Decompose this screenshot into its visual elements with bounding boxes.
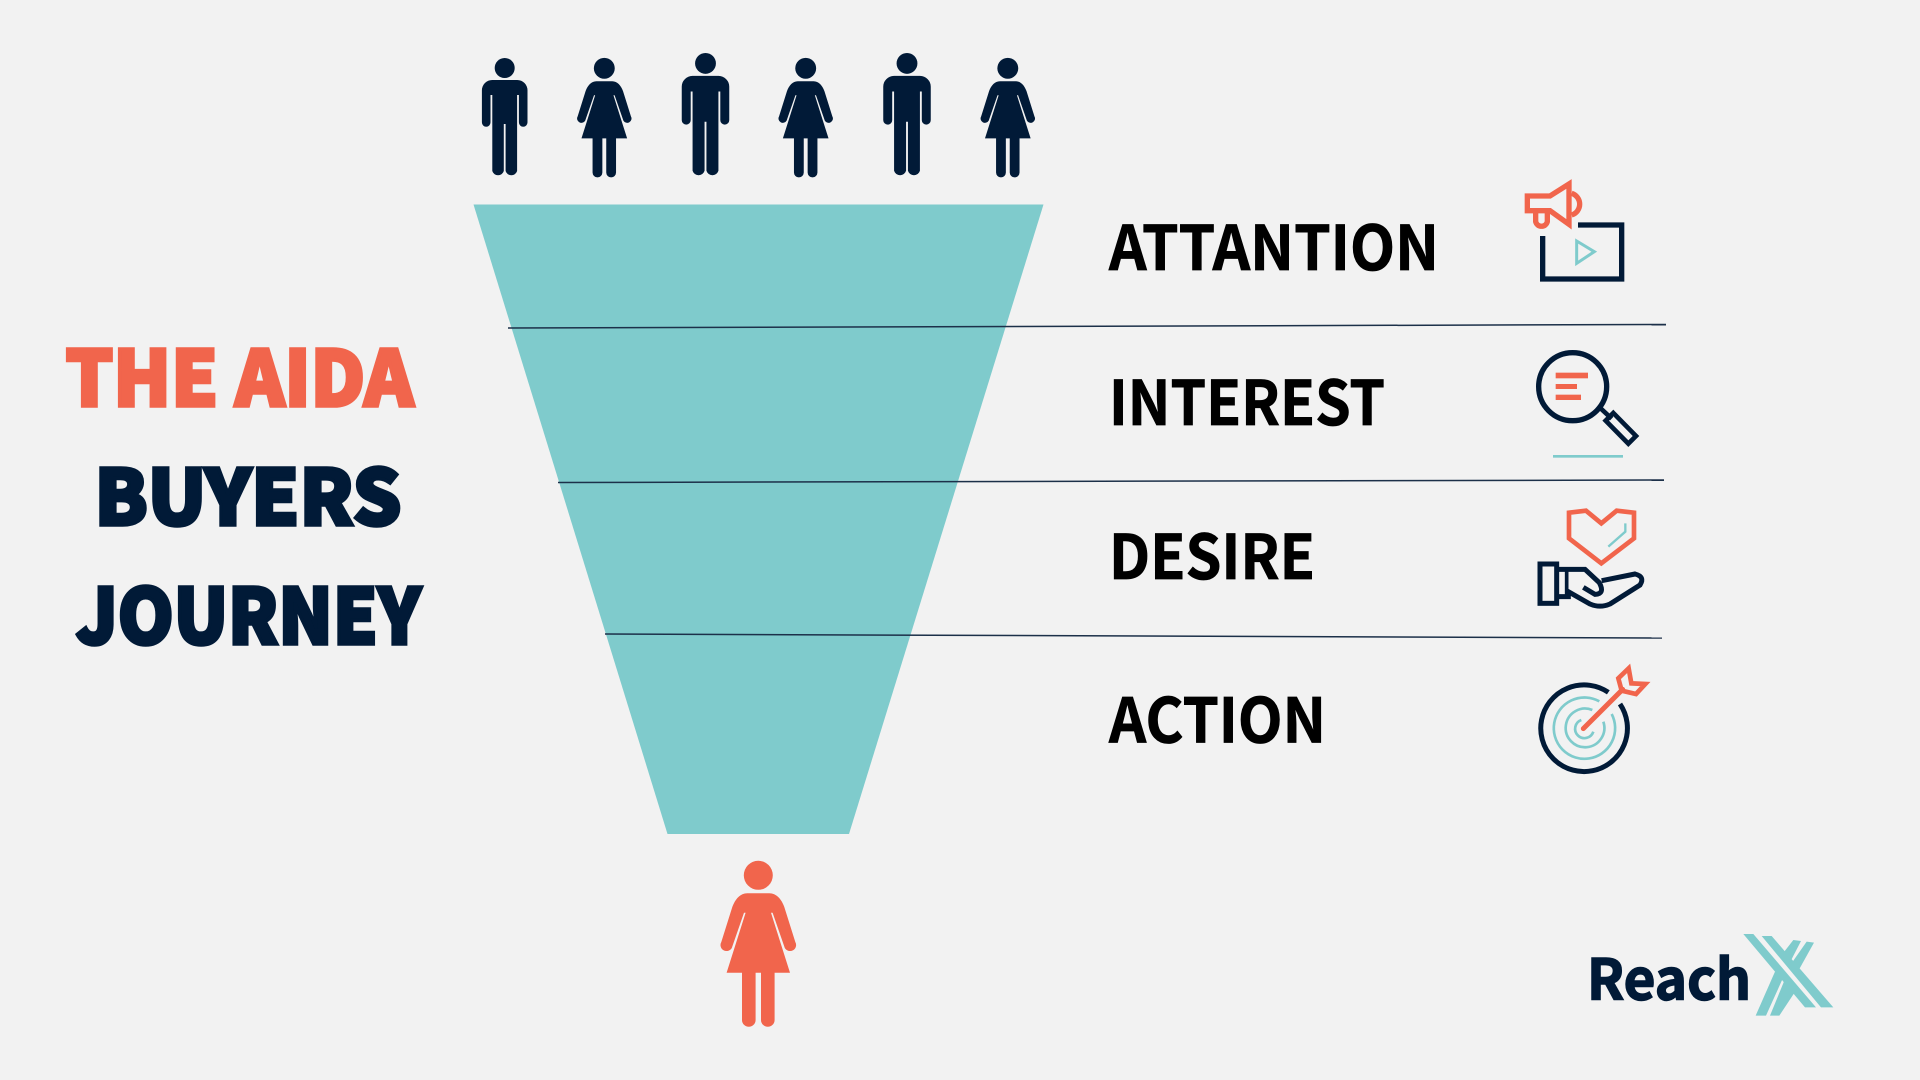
title: JOURNEY: [76, 556, 422, 667]
funnel: [474, 204, 1044, 834]
logo: ReachX: Reach: [1587, 935, 1751, 1016]
icon: heart in hand: [1540, 511, 1642, 606]
icon: megaphone and video screen: [1527, 184, 1622, 279]
title: THE AIDA: [66, 318, 415, 429]
person in orange below funnel: [721, 861, 796, 1027]
title: [66, 318, 422, 667]
label: attention: ATTANTION: [1108, 199, 1439, 288]
logo: ReachX: [1587, 934, 1833, 1016]
row of six people above funnel: [482, 53, 1035, 177]
icon: target with arrow: [1541, 668, 1645, 772]
icon: magnifying glass: [1539, 353, 1636, 458]
title: BUYERS: [94, 437, 402, 548]
label: interest: INTEREST: [1109, 354, 1385, 443]
stage divider lines: [508, 324, 1666, 638]
label: action: ACTION: [1108, 672, 1326, 761]
label: desire: DESIRE: [1109, 508, 1315, 597]
